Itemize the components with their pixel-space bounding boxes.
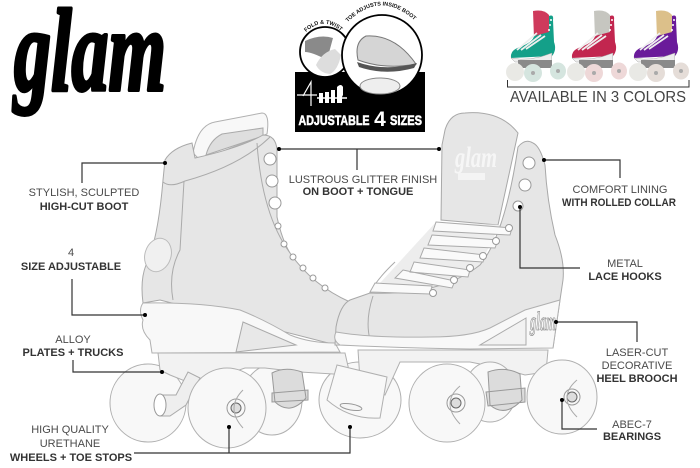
callout: wheels and toe stops: WHEELS + TOE STOPS	[10, 452, 132, 464]
lace backing	[370, 222, 500, 294]
callout: glitter finish: LUSTROUS GLITTER FINISH	[289, 174, 437, 186]
toe stop	[327, 365, 387, 418]
callout: bearings: BEARINGS	[603, 431, 661, 443]
callout: comfort lining: WITH ROLLED COLLAR	[562, 197, 676, 209]
callout: glitter finish	[277, 147, 441, 198]
colours caption: AVAILABLE IN 3 COLORS	[510, 89, 686, 106]
front wheel of left skate	[188, 368, 266, 448]
wheel behind right	[464, 362, 516, 422]
right skate illustration	[327, 113, 597, 442]
laces	[370, 222, 512, 294]
callout: comfort lining: COMFORT LINING	[573, 184, 667, 196]
skate: purple	[629, 10, 689, 82]
callout: size adjustable: 4	[68, 247, 74, 259]
callout: plates and trucks: ALLOY	[55, 334, 91, 346]
eyelets	[264, 153, 328, 291]
callout: high-cut boot: HIGH-CUT BOOT	[40, 201, 129, 213]
callout: bearings	[560, 398, 661, 443]
callout: heel brooch: DECORATIVE	[602, 360, 672, 372]
plate right	[358, 350, 548, 395]
adjustable sizes badge	[295, 2, 425, 132]
callout: lace hooks: LACE HOOKS	[588, 271, 662, 283]
callout: bearings: ABEC-7	[612, 419, 652, 431]
right skate illustration: glam	[530, 307, 556, 336]
tongue	[193, 113, 268, 160]
rear truck arm and hub	[160, 372, 200, 416]
sole	[335, 300, 560, 349]
circle: toe adjusts	[342, 15, 422, 95]
arc label: fold and twist: FOLD & TWIST	[304, 20, 344, 32]
callout: glitter finish: ON BOOT + TONGUE	[303, 186, 413, 198]
wheels	[409, 364, 485, 442]
callout: heel brooch	[554, 320, 678, 385]
callout: comfort lining	[542, 158, 676, 209]
skate: teal	[506, 10, 566, 82]
callout: lace hooks: METAL	[607, 258, 643, 270]
quad logo and skate silhouettes	[297, 82, 347, 106]
callout: size adjustable: SIZE ADJUSTABLE	[21, 261, 121, 273]
callout: high-cut boot: STYLISH, SCULPTED	[29, 187, 139, 199]
rear wheels behind	[242, 365, 302, 435]
hooks	[430, 157, 535, 296]
badge text: 4: 4	[374, 108, 386, 131]
heel block	[140, 303, 340, 353]
callout: wheels and toe stops: HIGH QUALITY	[31, 424, 109, 436]
callout: heel brooch: HEEL BROOCH	[596, 373, 678, 385]
tongue	[441, 113, 518, 225]
boot body	[335, 141, 563, 348]
callout: heel brooch: LASER-CUT	[606, 347, 668, 359]
colour variants	[506, 10, 689, 106]
callout: lace hooks	[518, 205, 662, 283]
callout: size adjustable	[21, 247, 147, 317]
badge text: adjustable: ADJUSTABLE	[298, 112, 370, 128]
plate	[158, 353, 350, 385]
tongue tag	[458, 173, 485, 180]
circle: fold and twist	[300, 27, 350, 77]
left skate illustration	[110, 113, 401, 448]
arc label: toe adjusts: TOE ADJUSTS INSIDE BOOT	[345, 2, 417, 22]
callout: plates and trucks: PLATES + TRUCKS	[23, 347, 123, 359]
tongue logo: glam	[454, 141, 497, 174]
skate: raspberry	[567, 10, 627, 82]
callout: plates and trucks	[23, 334, 164, 374]
callout: high-cut boot	[29, 161, 167, 213]
ankle badge	[140, 235, 176, 275]
callout: wheels and toe stops: URETHANE	[40, 438, 100, 450]
callout: wheels and toe stops	[10, 424, 352, 464]
badge text: sizes: SIZES	[390, 112, 422, 128]
boot body	[142, 135, 350, 345]
bracket	[508, 80, 689, 87]
black size panel	[295, 72, 425, 132]
